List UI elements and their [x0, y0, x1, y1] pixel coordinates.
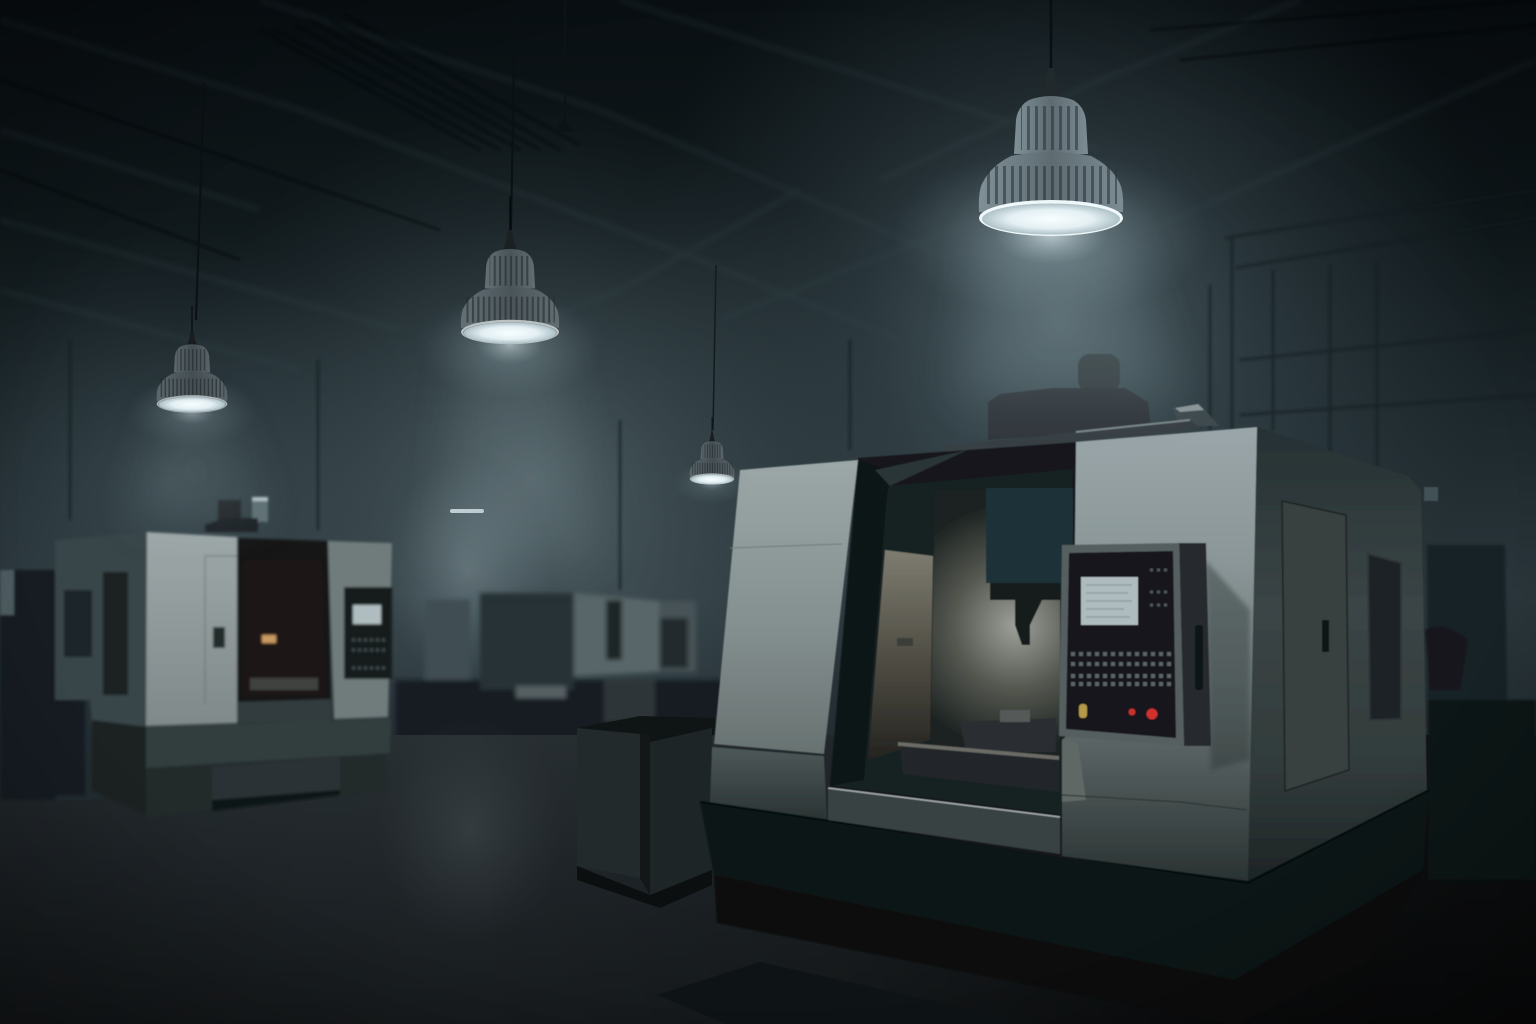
right panel: [328, 541, 392, 719]
dark door window: [237, 538, 331, 702]
floor mat: [657, 962, 1034, 1024]
side window: [1368, 554, 1401, 720]
sill: [828, 788, 1060, 854]
lamp glow halos: [126, 150, 1211, 505]
handle: [213, 627, 225, 648]
keypad: [1071, 654, 1172, 684]
pendant lamp: large: [979, 0, 1123, 236]
white front panel: [146, 532, 237, 726]
plinth: [700, 790, 1429, 1024]
wall columns and windows on right: [70, 190, 1536, 590]
buttons: [1079, 704, 1087, 718]
side door: [1282, 501, 1349, 791]
pendant lamp: small left: [157, 83, 227, 413]
left background machine: [0, 497, 392, 818]
left door panel: [710, 460, 858, 819]
ceiling corrugation: [0, 0, 1536, 260]
pendant lamp: medium: [461, 0, 559, 344]
spindle: [986, 488, 1073, 583]
machine side: [55, 532, 147, 726]
distant hanging light fixture: [382, 460, 552, 680]
waste bins: [577, 716, 715, 908]
background machines: [395, 593, 725, 740]
screen: [1081, 577, 1138, 625]
right background machine: [1425, 545, 1536, 880]
hanging cord: dim fixture: [554, 0, 574, 132]
main CNC machine: [700, 354, 1438, 1024]
workpiece and tray: [960, 718, 1056, 752]
side panel: [1248, 427, 1438, 881]
items on top: [218, 500, 241, 520]
control panel: [1059, 543, 1211, 746]
base: [92, 720, 146, 815]
head and top of machine: [943, 354, 1219, 462]
ceiling beams as faint light bands: [0, 0, 1536, 370]
left cabinets in shadow: [0, 570, 55, 800]
open chamber: [828, 442, 1078, 860]
light cones: [130, 225, 1180, 560]
floor: [0, 715, 1536, 1024]
door frame: [830, 460, 889, 786]
right front panel: [1062, 427, 1257, 881]
control panel: [344, 587, 392, 679]
pendant lamp: distant: [690, 265, 734, 485]
